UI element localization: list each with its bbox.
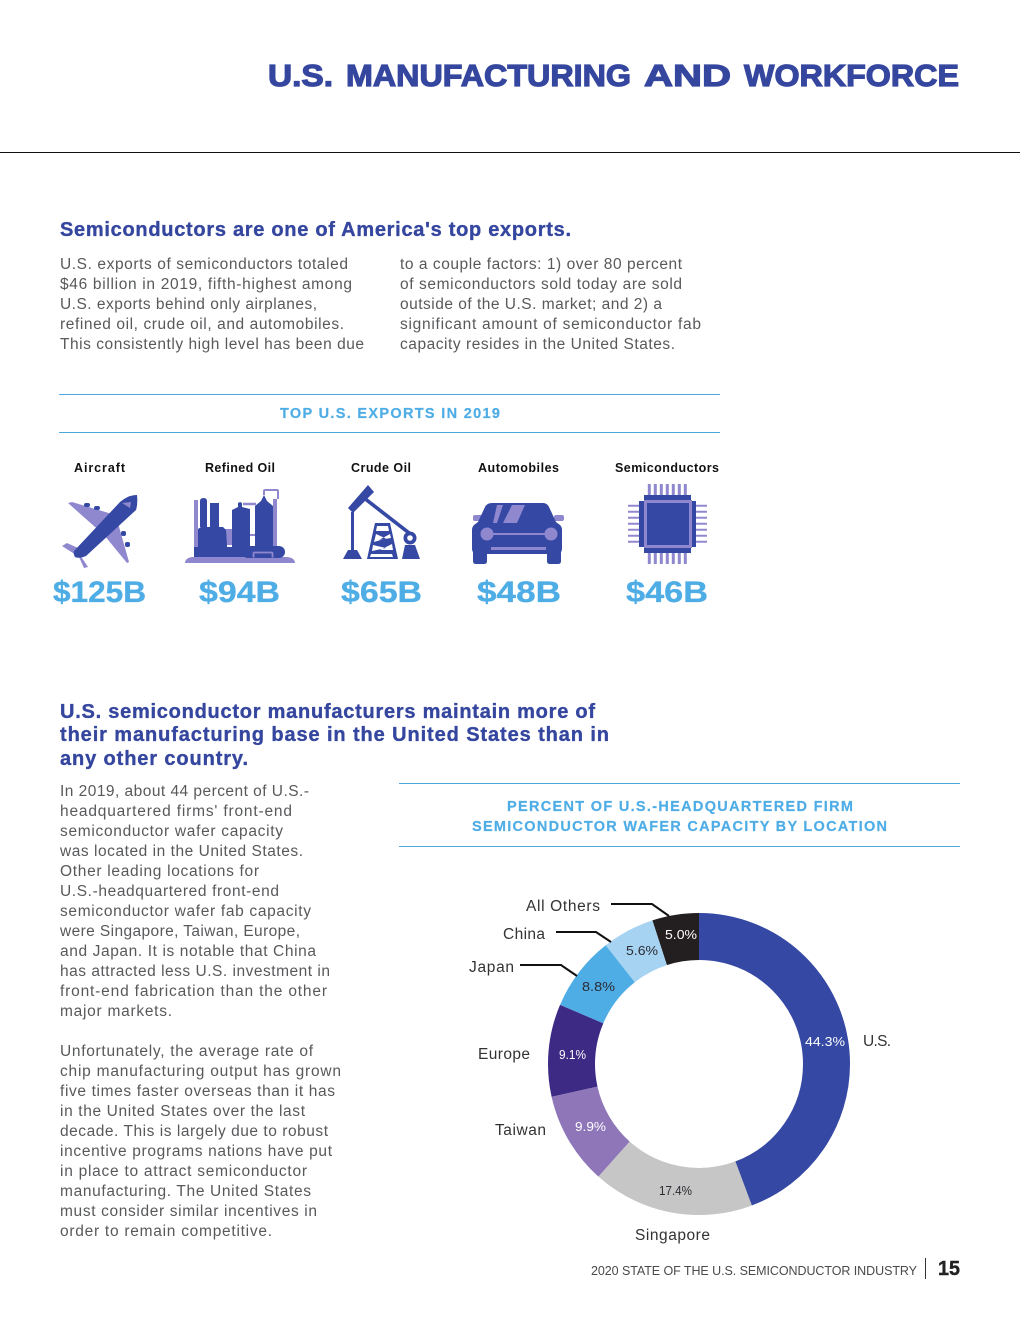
text block: manufacturing paragraph two: incentive programs nations have put: [60, 1143, 333, 1160]
donut labels: Singapore: [635, 1227, 710, 1244]
text block: manufacturing paragraph one: Other leading locations for: [60, 863, 259, 880]
text block: manufacturing paragraph two: decade. This is largely due to robust: [60, 1123, 329, 1140]
donut labels: Japan: [469, 959, 514, 976]
icon: airplane: [62, 495, 137, 568]
donut chart: wafer capacity by location: [469, 898, 891, 1244]
footer: [591, 1258, 960, 1280]
text block: manufacturing paragraph one: and Japan. It is notable that China: [60, 943, 316, 960]
heading: manufacturing base: U.S. semiconductor manufacturers maintain more of: [60, 701, 595, 723]
text block: manufacturing paragraph one: was located in the United States.: [59, 843, 303, 860]
footer: 15: [938, 1258, 960, 1280]
text block: exports left column: U.S. exports of semiconductors totaled: [60, 256, 348, 273]
chart heading: wafer capacity: [472, 799, 887, 835]
donut labels: China: [503, 926, 545, 943]
chart heading: wafer capacity: SEMICONDUCTOR WAFER CAPACITY BY LOCATION: [472, 819, 887, 835]
text block: manufacturing paragraph one: has attracted less U.S. investment in: [60, 963, 330, 980]
donut values: 44.3%: [805, 1034, 845, 1049]
heading: manufacturing base: their manufacturing base in the United States than in: [60, 724, 609, 746]
title: MANUFACTURING: [346, 58, 631, 93]
text block: manufacturing paragraph one: front-end fabrication than the other: [60, 983, 327, 1000]
export item: crude oil: $65B: [341, 576, 422, 609]
donut labels: Taiwan: [495, 1122, 546, 1139]
donut values: 17.4%: [659, 1183, 692, 1198]
donut values: 5.0%: [665, 927, 697, 942]
text block: manufacturing paragraph two: Unfortunately, the average rate of: [60, 1043, 314, 1060]
donut ring: [572, 936, 826, 1192]
text block: manufacturing paragraph one: were Singapore, Taiwan, Europe,: [59, 923, 300, 940]
export item: semiconductors: Semiconductors: [615, 461, 719, 475]
text block: exports left column: refined oil, crude oil, and automobiles.: [60, 316, 344, 333]
donut labels: All Others: [526, 898, 600, 915]
text block: manufacturing paragraph two: order to remain competitive.: [60, 1223, 272, 1240]
text block: exports left column: [60, 256, 364, 353]
export item: refined oil: Refined Oil: [205, 461, 275, 475]
text block: exports right column: of semiconductors sold today are sold: [400, 276, 682, 293]
donut labels: U.S.: [863, 1033, 891, 1050]
text block: manufacturing paragraph one: semiconductor wafer capacity: [60, 823, 283, 840]
donut values: 9.1%: [559, 1047, 586, 1062]
text block: manufacturing paragraph one: major markets.: [60, 1003, 172, 1020]
chart heading: top exports: TOP U.S. EXPORTS IN 2019: [280, 406, 500, 422]
icon: oil pump: [343, 485, 420, 559]
text block: manufacturing paragraph two: [60, 1043, 341, 1240]
text block: manufacturing paragraph one: U.S.-headquartered front-end: [60, 883, 279, 900]
export item: automobiles: Automobiles: [478, 461, 559, 475]
export item: aircraft: $125B: [53, 576, 146, 609]
export item: refined oil: [185, 461, 295, 609]
export item: aircraft: [53, 461, 146, 609]
heading: manufacturing base: any other country.: [60, 748, 248, 770]
text block: manufacturing paragraph two: must consider similar incentives in: [60, 1203, 317, 1220]
donut labels: [469, 898, 891, 1244]
text block: manufacturing paragraph one: headquartered firms' front-end: [60, 803, 292, 820]
title: AND: [644, 58, 731, 93]
donut values: 8.8%: [582, 979, 615, 994]
export item: crude oil: Crude Oil: [351, 461, 411, 475]
donut values: 5.6%: [626, 943, 658, 958]
leader lines: [520, 904, 669, 976]
text block: exports right column: outside of the U.S. market; and 2) a: [400, 296, 662, 313]
heading: top exports: Semiconductors are one of America's top exports.: [60, 219, 571, 241]
export item: semiconductors: $46B: [626, 576, 708, 609]
text block: exports right column: significant amount of semiconductor fab: [400, 316, 701, 333]
text block: exports left column: U.S. exports behind only airplanes,: [60, 296, 317, 313]
heading: manufacturing base: [60, 701, 609, 770]
text block: exports left column: This consistently high level has been due: [60, 336, 364, 353]
text block: manufacturing paragraph two: in place to attract semiconductor: [60, 1163, 307, 1180]
donut labels: Europe: [478, 1046, 530, 1063]
export item: refined oil: $94B: [199, 576, 280, 609]
export item: automobiles: $48B: [477, 576, 561, 609]
donut values: [559, 927, 845, 1198]
text block: manufacturing paragraph one: [59, 783, 330, 1020]
export item: semiconductors: [615, 461, 719, 609]
donut values: 9.9%: [575, 1119, 606, 1134]
text block: manufacturing paragraph one: In 2019, about 44 percent of U.S.-: [60, 783, 309, 800]
text block: exports left column: $46 billion in 2019, fifth-highest among: [60, 276, 352, 293]
icon: car: [472, 503, 564, 564]
icon: chip: [628, 484, 707, 564]
export item: automobiles: [472, 461, 564, 609]
icon: refinery: [185, 490, 295, 563]
text block: manufacturing paragraph two: five times faster overseas than it has: [60, 1083, 335, 1100]
text block: exports right column: to a couple factors: 1) over 80 percent: [400, 256, 683, 273]
title: U.S.: [268, 58, 333, 93]
title: [268, 58, 959, 93]
footer: 2020 STATE OF THE U.S. SEMICONDUCTOR INDUSTRY: [591, 1264, 918, 1278]
text block: manufacturing paragraph two: in the United States over the last: [60, 1103, 306, 1120]
text block: manufacturing paragraph one: semiconductor wafer fab capacity: [60, 903, 311, 920]
text block: exports right column: [400, 256, 701, 353]
chart heading: wafer capacity: PERCENT OF U.S.-HEADQUARTERED FIRM: [507, 799, 853, 815]
text block: exports right column: capacity resides in the United States.: [400, 336, 675, 353]
text block: manufacturing paragraph two: chip manufacturing output has grown: [60, 1063, 341, 1080]
title: WORKFORCE: [744, 58, 959, 93]
export item: aircraft: Aircraft: [74, 461, 126, 475]
text block: manufacturing paragraph two: manufacturing. The United States: [60, 1183, 311, 1200]
export item: crude oil: [341, 461, 422, 609]
